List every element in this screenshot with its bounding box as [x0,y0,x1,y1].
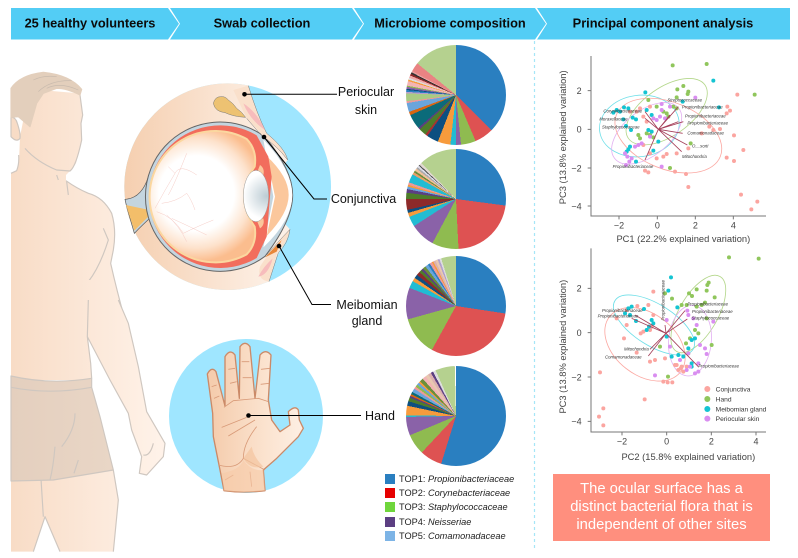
loading labels [598,279,740,369]
lower lid and meibomian gland [258,229,290,282]
points: conjunctiva [599,292,687,425]
loading labels: Comamonadaceae [605,354,642,359]
points: conjunctiva [630,95,757,209]
legend item TOP2: TOP2: Corynebacteriaceae [399,488,510,498]
optic nerve [125,177,152,233]
human body illustration [11,72,165,552]
header: process chevrons [11,8,790,40]
loading labels: Propionibacteriaceae [698,364,740,369]
hand illustration [169,339,323,493]
palm creases and shading [212,362,270,487]
plot legend [704,386,767,423]
loading labels: Moraxellaceae [599,117,628,122]
legend item TOP1: TOP1: Propionibacteriaceae [399,474,514,484]
points: meibomian gland [613,81,719,162]
loading labels: Propionibacteriaceae [602,308,643,313]
eyeball [145,122,293,271]
tick labels and axis titles: 2 [577,86,582,96]
pie chart: hand [406,366,506,466]
tick labels and axis titles: 2 [693,221,698,231]
points: periocular skin [625,98,695,167]
blue background circle [124,83,331,290]
axes [588,56,766,219]
loading arrows [645,107,687,160]
tick labels and axis titles: PC3 (13.8% explained variation) [558,70,568,204]
points: meibomian gland [625,277,695,367]
beige head tissue [124,83,290,290]
step 3 chevron: Microbiome composition [374,16,526,30]
loading labels: Mitochondria [682,154,707,159]
pie chart: conjunctiva [406,149,506,249]
step 3 chevron [354,8,546,40]
legend item TOP5: TOP5: Comamonadaceae [399,531,506,541]
loading labels: Propionibacteriaceae [692,309,733,314]
site label: meibomian gland: Meibomian [336,298,398,312]
loading labels: Propionibacteriaceae [682,105,723,110]
tick labels and axis titles: −2 [614,221,624,231]
loading labels: Propionibacteriaceae [613,164,654,169]
confidence ellipses [595,65,733,188]
loading labels: Streptococcaceae [667,97,703,102]
tick labels and axis titles: PC3 (13.8% explained variation) [558,280,568,414]
loading labels: Propionibacteriaceae [687,302,729,307]
loading labels: Propionibacteriaceae [598,313,639,318]
tick labels and axis titles: 0 [577,125,582,135]
tick labels and axis titles: 0 [577,328,582,338]
site label: meibomian gland: gland [352,314,382,328]
upper lid and lacrimal gland [213,86,288,160]
axes [588,248,766,435]
callout: conclusion: distinct bacterial flora that is [570,499,753,515]
points: periocular skin [655,311,713,375]
PCA plot 2: PC2 vs PC3 [558,248,767,462]
loading labels: Propionibacteriaceae [661,279,666,321]
tick labels and axis titles: −2 [617,437,627,447]
plot legend: Periocular skin [716,416,760,423]
site label: conjunctiva: Conjunctiva [331,192,396,206]
tick labels and axis titles: 0 [655,221,660,231]
step 1 chevron: 25 healthy volunteers [25,16,155,30]
leader: periocular skin [242,92,337,97]
hand shape [207,343,303,492]
tick labels and axis titles: 0 [664,437,669,447]
legend item TOP3: TOP3: Staphylococcaceae [399,502,508,512]
tick labels and axis titles: 2 [709,437,714,447]
loading labels: Propionibacteriaceae [687,120,729,125]
loading labels: Corynebacteriaceae [603,109,643,114]
tick labels and axis titles: 4 [731,221,736,231]
tick labels and axis titles [558,70,750,244]
lens [243,170,269,222]
blue background circle [169,339,323,493]
step 1 chevron [11,8,179,40]
leader: hand [246,413,361,418]
tick labels and axis titles: PC1 (22.2% explained variation) [616,234,750,244]
loading arrows [632,311,698,367]
pie chart: meibomian gland [406,256,506,356]
loading labels: Staphylococcaceae [692,316,730,321]
points: hand [638,64,755,168]
tick labels and axis titles: PC2 (15.8% explained variation) [621,452,755,462]
step 4 chevron [537,8,790,40]
plot legend: Conjunctiva [716,386,751,393]
loading labels: O__sorti [692,143,709,148]
points: hand [660,257,759,377]
pie chart: periocular skin [406,45,506,145]
callout: conclusion: The ocular surface has a [580,481,743,497]
plot legend: Meibomian gland [716,406,767,413]
loading labels: Mitochondria [624,347,649,352]
legend: top families [385,474,514,541]
leader: conjunctiva [262,135,327,199]
loading labels: Propionibacteriaceae [685,113,726,118]
tick labels and axis titles: −4 [571,201,582,211]
site label: hand: Hand [365,409,395,423]
callout: conclusion [553,474,770,541]
legend item TOP4: TOP4: Neisseriae [399,517,471,527]
step 4 chevron: Principal component analysis [573,16,753,30]
loading labels: Staphylococcaceae [602,125,640,130]
tick labels and axis titles: −2 [571,163,582,173]
loading labels: Comamonadaceae [687,131,724,136]
tick labels and axis titles [558,280,758,462]
site label: periocular skin: skin [355,103,377,117]
tick labels and axis titles: 2 [577,284,582,294]
tick labels and axis titles: −2 [571,372,582,382]
callout: conclusion: independent of other sites [576,517,747,533]
eye illustration: conjunctiva and periocular region [124,83,331,290]
plot legend: Hand [716,396,732,403]
step 2 chevron [170,8,363,40]
PCA plot 1: PC1 vs PC3 [558,56,766,244]
step 2 chevron: Swab collection [214,16,311,30]
tick labels and axis titles: 4 [753,437,758,447]
tick labels and axis titles: −4 [571,417,582,427]
site label: periocular skin: Periocular [338,85,394,99]
leader: meibomian gland [277,244,331,304]
loading labels [599,97,729,169]
retinal vessels [155,153,213,242]
confidence ellipses [591,267,737,396]
